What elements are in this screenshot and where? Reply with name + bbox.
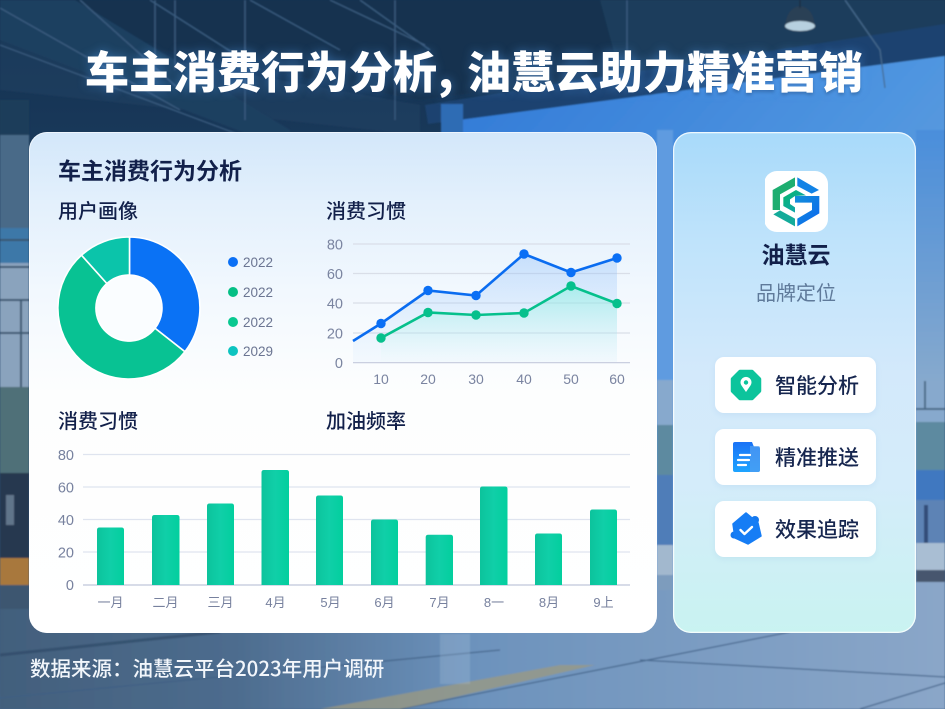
donut legend: 2022 bbox=[243, 285, 273, 300]
donut legend: 2022 bbox=[243, 315, 273, 330]
heading: consumption habits (bars): 消费习惯 bbox=[58, 405, 138, 434]
centre gap strip bbox=[657, 130, 673, 380]
line chart: 20 bbox=[420, 371, 436, 387]
donut legend: 2029 bbox=[243, 344, 273, 359]
label: 效果追踪 bbox=[775, 514, 859, 544]
line chart: 80 bbox=[327, 238, 343, 254]
line chart: 60 bbox=[327, 267, 343, 283]
bar chart: 二月 bbox=[152, 595, 179, 610]
icon: check badge bbox=[730, 512, 762, 545]
bar chart: 9上 bbox=[593, 595, 614, 610]
bar chart: 7月 bbox=[429, 595, 450, 610]
button: precise push bbox=[715, 429, 876, 485]
left strip bbox=[0, 100, 29, 135]
bar chart: 4月 bbox=[265, 595, 286, 610]
line chart: 10 bbox=[373, 371, 389, 387]
brand positioning subtitle: 品牌定位 bbox=[756, 277, 836, 306]
bar chart: 0 bbox=[66, 578, 74, 594]
bar chart: 三月 bbox=[207, 595, 234, 610]
line chart: 40 bbox=[327, 296, 343, 312]
data source footer: 数据来源：油慧云平台2023年用户调研 bbox=[30, 652, 384, 682]
icon: document bbox=[733, 442, 760, 472]
line chart: 30 bbox=[468, 371, 484, 387]
brand name: 油慧云 bbox=[762, 236, 830, 270]
title bbox=[84, 37, 865, 101]
bar chart: 6月 bbox=[374, 595, 395, 610]
title: 油慧云助力精准营销 bbox=[467, 37, 863, 101]
line chart: 60 bbox=[609, 371, 625, 387]
donut legend bbox=[228, 255, 273, 359]
donut chart bbox=[58, 237, 200, 379]
bar chart: 8月 bbox=[539, 595, 559, 610]
line chart: 20 bbox=[327, 326, 343, 342]
button: smart analysis bbox=[715, 357, 876, 413]
brand logo bbox=[765, 171, 828, 232]
title: , bbox=[438, 37, 453, 101]
bar chart: 40 bbox=[58, 513, 74, 529]
title: 车主消费行为分析 bbox=[85, 37, 437, 101]
bar chart: 80 bbox=[58, 448, 74, 464]
line chart: 50 bbox=[563, 371, 579, 387]
line chart: 40 bbox=[516, 371, 532, 387]
bar chart: 20 bbox=[58, 546, 74, 562]
bar chart bbox=[58, 448, 630, 610]
bar chart: 一月 bbox=[97, 595, 124, 610]
hanging lamp bbox=[785, 6, 815, 28]
floor bbox=[0, 582, 945, 709]
line chart bbox=[327, 238, 630, 387]
panel heading: 车主消费行为分析 bbox=[58, 152, 242, 186]
label: 精准推送 bbox=[775, 442, 859, 472]
heading: consumption habits: 消费习惯 bbox=[326, 195, 406, 224]
panel: brand positioning bbox=[673, 132, 916, 633]
bar chart: 8一 bbox=[484, 595, 504, 610]
label: 智能分析 bbox=[775, 370, 859, 400]
right strip bbox=[916, 130, 945, 381]
line chart: 0 bbox=[335, 356, 343, 372]
icon: location badge bbox=[730, 370, 762, 400]
donut legend: 2022 bbox=[243, 255, 273, 270]
panel: consumer behaviour analysis bbox=[29, 132, 657, 633]
bar chart: 60 bbox=[58, 480, 74, 496]
heading: user profile: 用户画像 bbox=[58, 195, 138, 224]
button: effect tracking bbox=[715, 500, 876, 556]
heading: refuel frequency: 加油频率 bbox=[326, 405, 406, 434]
bar chart: 5月 bbox=[320, 595, 341, 610]
